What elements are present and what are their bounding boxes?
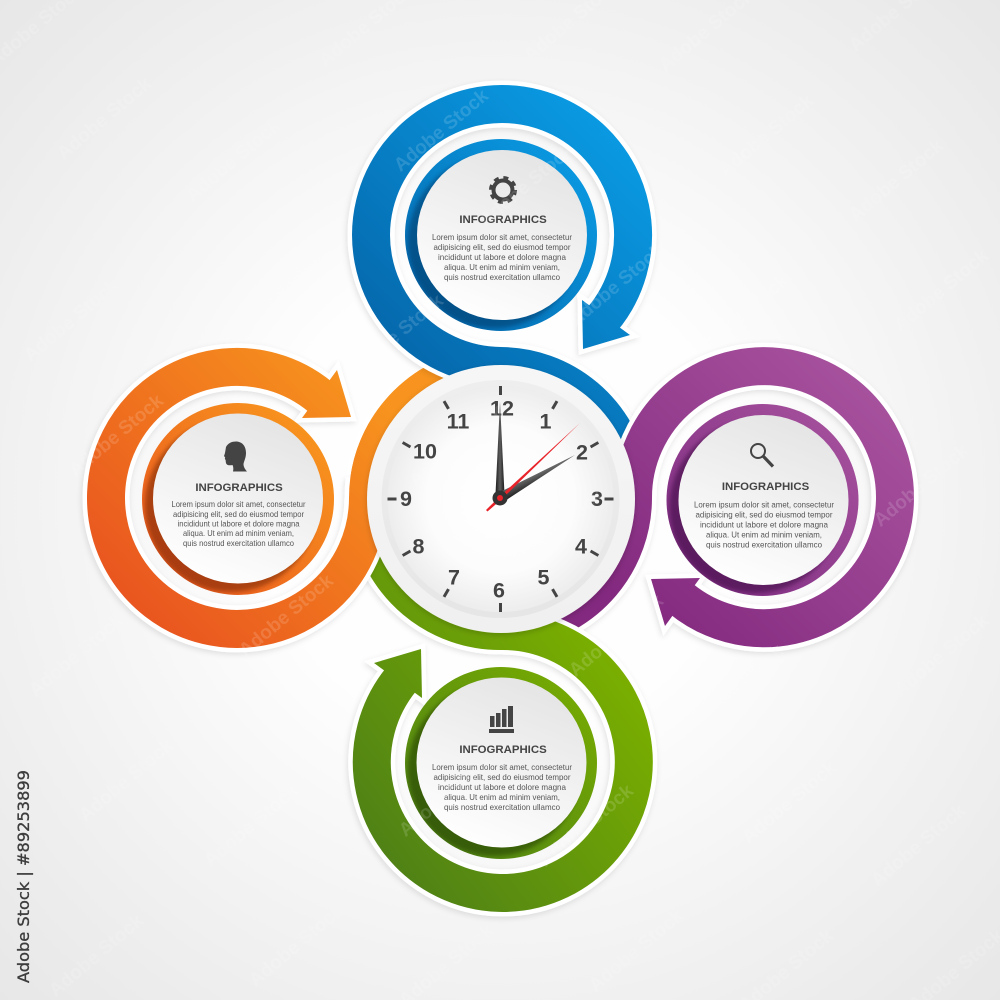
watermark: Adobe Stock bbox=[685, 640, 788, 731]
text block: aliqua. Ut enim ad minim veniam, bbox=[706, 530, 822, 540]
vertical stock id caption: Adobe Stock | #89253899 bbox=[14, 770, 33, 983]
heading: INFOGRAPHICS bbox=[722, 481, 810, 493]
text block: aliqua. Ut enim ad minim veniam, bbox=[183, 528, 294, 538]
watermark: Adobe Stock bbox=[200, 780, 303, 871]
text block: Lorem ipsum dolor sit amet, consectetur bbox=[432, 762, 572, 772]
clock numerals: 4 bbox=[575, 534, 587, 558]
watermark: Adobe Stock bbox=[25, 610, 128, 701]
clock numerals bbox=[400, 396, 603, 602]
icon: magnifier bbox=[751, 444, 773, 466]
text block: quis nostrud exercitation ullamco bbox=[706, 540, 822, 550]
clock numerals: 3 bbox=[591, 487, 603, 511]
text block: aliqua. Ut enim ad minim veniam, bbox=[444, 792, 560, 802]
icon: gear bbox=[490, 178, 516, 202]
clock face bbox=[388, 386, 614, 612]
panel: green info disc bbox=[405, 667, 597, 859]
watermark: Adobe Stock bbox=[565, 590, 668, 681]
panel: blue info disc bbox=[405, 139, 597, 331]
heading: INFOGRAPHICS bbox=[459, 744, 547, 756]
clock bbox=[367, 365, 635, 633]
heading: INFOGRAPHICS bbox=[195, 482, 283, 494]
text block bbox=[432, 232, 572, 282]
watermark: Adobe Stock bbox=[345, 290, 448, 381]
text block: aliqua. Ut enim ad minim veniam, bbox=[444, 262, 560, 272]
text block: quis nostrud exercitation ullamco bbox=[444, 272, 560, 282]
text block: incididunt ut labore et dolore magna bbox=[700, 520, 828, 530]
hour hand bbox=[498, 455, 575, 502]
watermark: Adobe Stock bbox=[738, 757, 841, 848]
clock numerals: 6 bbox=[493, 578, 505, 602]
watermark: Adobe Stock bbox=[182, 115, 285, 206]
panel: purple arrow ring bbox=[523, 366, 895, 628]
watermark: Adobe Stock bbox=[535, 780, 638, 871]
watermark: Adobe Stock bbox=[230, 240, 333, 331]
watermark: Adobe Stock bbox=[505, 485, 608, 576]
watermark: Adobe Stock bbox=[65, 390, 168, 481]
text block: adipisicing elit, sed do eiusmod tempor bbox=[434, 242, 571, 252]
watermark: Adobe Stock bbox=[690, 270, 793, 361]
watermark: Adobe Stock bbox=[405, 400, 508, 491]
clock numerals: 1 bbox=[540, 410, 552, 434]
text block: Lorem ipsum dolor sit amet, consectetur bbox=[432, 232, 572, 242]
panel: orange arrow ring bbox=[106, 367, 386, 629]
watermark: Adobe Stock bbox=[53, 73, 156, 164]
clock hub bbox=[492, 490, 508, 506]
watermark: Adobe Stock bbox=[845, 135, 948, 226]
clock numerals: 12 bbox=[490, 396, 514, 420]
icon: head silhouette bbox=[224, 442, 247, 472]
watermark: Adobe Stock bbox=[867, 800, 970, 891]
text block: incididunt ut labore et dolore magna bbox=[178, 518, 300, 528]
watermark: Adobe Stock bbox=[395, 750, 498, 841]
watermark: Adobe Stock bbox=[45, 910, 148, 1000]
text block bbox=[694, 500, 834, 550]
minute hand bbox=[496, 402, 504, 494]
text block: incididunt ut labore et dolore magna bbox=[438, 782, 566, 792]
orange tail behind the clock bbox=[368, 368, 477, 498]
watermark: Adobe Stock bbox=[890, 245, 993, 336]
panel: green arrow ring bbox=[370, 521, 634, 893]
text block: incididunt ut labore et dolore magna bbox=[438, 252, 566, 262]
text block: Lorem ipsum dolor sit amet, consectetur bbox=[172, 499, 306, 509]
watermark: Adobe Stock bbox=[870, 440, 973, 531]
text block: adipisicing elit, sed do eiusmod tempor bbox=[696, 510, 833, 520]
clock rim bbox=[367, 365, 635, 633]
watermark: Adobe Stock bbox=[20, 275, 123, 366]
text block bbox=[172, 499, 306, 548]
second hand bbox=[486, 423, 580, 512]
text block bbox=[432, 762, 572, 812]
hour ticks bbox=[388, 386, 614, 612]
watermark: Adobe Stock bbox=[565, 240, 668, 331]
text block: quis nostrud exercitation ullamco bbox=[183, 538, 294, 548]
clock numerals: 2 bbox=[576, 440, 588, 464]
panel: orange info disc bbox=[142, 403, 334, 595]
panel: blue arrow ring bbox=[371, 104, 633, 475]
watermark: Adobe Stock bbox=[390, 85, 493, 176]
watermark: Adobe Stock bbox=[475, 140, 578, 231]
clock numerals: 5 bbox=[538, 566, 550, 590]
text block: adipisicing elit, sed do eiusmod tempor bbox=[434, 772, 571, 782]
text block: adipisicing elit, sed do eiusmod tempor bbox=[173, 509, 304, 519]
clock numerals: 8 bbox=[413, 534, 425, 558]
icon: bar chart bbox=[489, 706, 514, 733]
watermark: Adobe Stock bbox=[245, 900, 348, 991]
clock numerals: 9 bbox=[400, 487, 412, 511]
clock numerals: 11 bbox=[447, 410, 469, 434]
panel: purple info disc bbox=[666, 404, 858, 596]
watermark: Adobe Stock bbox=[585, 905, 688, 996]
text block: Lorem ipsum dolor sit amet, consectetur bbox=[694, 500, 834, 510]
watermark: Adobe Stock bbox=[235, 570, 338, 661]
heading: INFOGRAPHICS bbox=[459, 214, 547, 226]
watermark: Adobe Stock bbox=[890, 610, 993, 701]
clock numerals: 7 bbox=[448, 566, 460, 590]
text block: quis nostrud exercitation ullamco bbox=[444, 802, 560, 812]
watermark: Adobe Stock bbox=[715, 90, 818, 181]
watermark: Adobe Stock bbox=[75, 735, 178, 826]
clock numerals: 10 bbox=[413, 440, 437, 464]
